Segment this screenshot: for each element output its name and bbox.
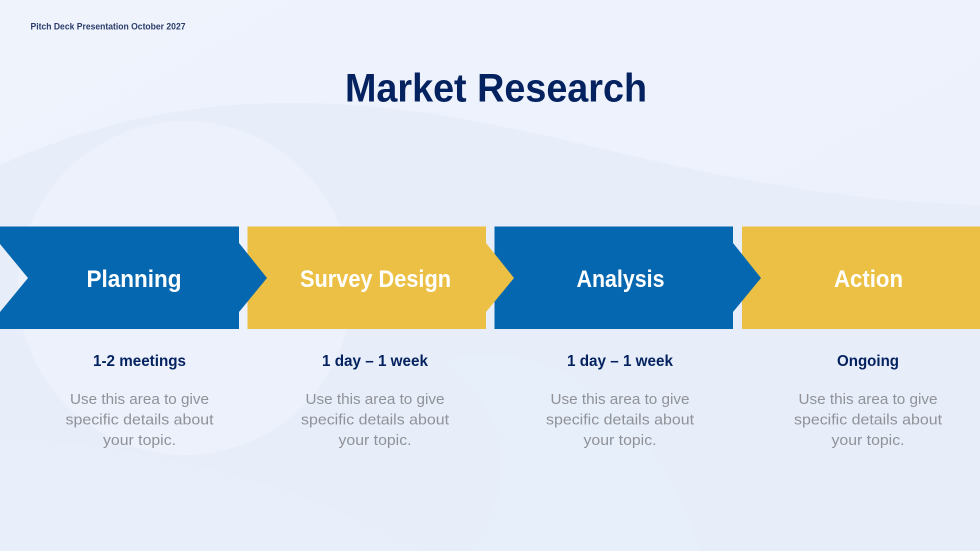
column 2 description: Use this area to give: [306, 391, 444, 408]
step 1 shape: Planning: [0, 226, 267, 329]
column 3 description: [546, 391, 695, 449]
title: Market Research: [345, 66, 647, 110]
step 1 label: Planning: [86, 266, 182, 293]
step 4 shape: Action: [742, 226, 980, 329]
column 4 duration: Ongoing: [837, 353, 899, 370]
column 2 description: [301, 391, 450, 449]
column 3 details: [546, 353, 695, 449]
column 2 description: your topic.: [338, 432, 412, 449]
column 4 description: [794, 391, 943, 449]
column 4 description: Use this area to give: [798, 391, 938, 408]
step 2 shape: Survey Design: [248, 226, 514, 329]
column 1 description: Use this area to give: [70, 391, 209, 408]
column 4 details: [794, 353, 943, 449]
column 3 description: Use this area to give: [550, 391, 690, 408]
process chevrons: [0, 226, 980, 329]
step 3 shape: Analysis: [494, 226, 761, 329]
column 3 description: specific details about: [546, 412, 695, 428]
step 2 label: Survey Design: [300, 266, 451, 293]
step 4 label: Action: [834, 266, 903, 293]
column 3 description: your topic.: [584, 432, 656, 449]
column 1 duration: 1-2 meetings: [93, 353, 186, 370]
column 1 description: specific details about: [66, 412, 214, 428]
column 1 description: [66, 391, 214, 449]
column 2 description: specific details about: [301, 412, 450, 428]
column 4 description: specific details about: [794, 412, 943, 428]
column 4 description: your topic.: [832, 432, 904, 449]
column 1 description: your topic.: [103, 432, 176, 449]
column 2 details: [301, 353, 450, 449]
header label: Pitch Deck Presentation October 2027: [30, 22, 186, 32]
step 3 label: Analysis: [576, 266, 664, 293]
column 1 details: [66, 353, 214, 449]
column 3 duration: 1 day – 1 week: [567, 353, 673, 370]
column 2 duration: 1 day – 1 week: [322, 353, 428, 370]
